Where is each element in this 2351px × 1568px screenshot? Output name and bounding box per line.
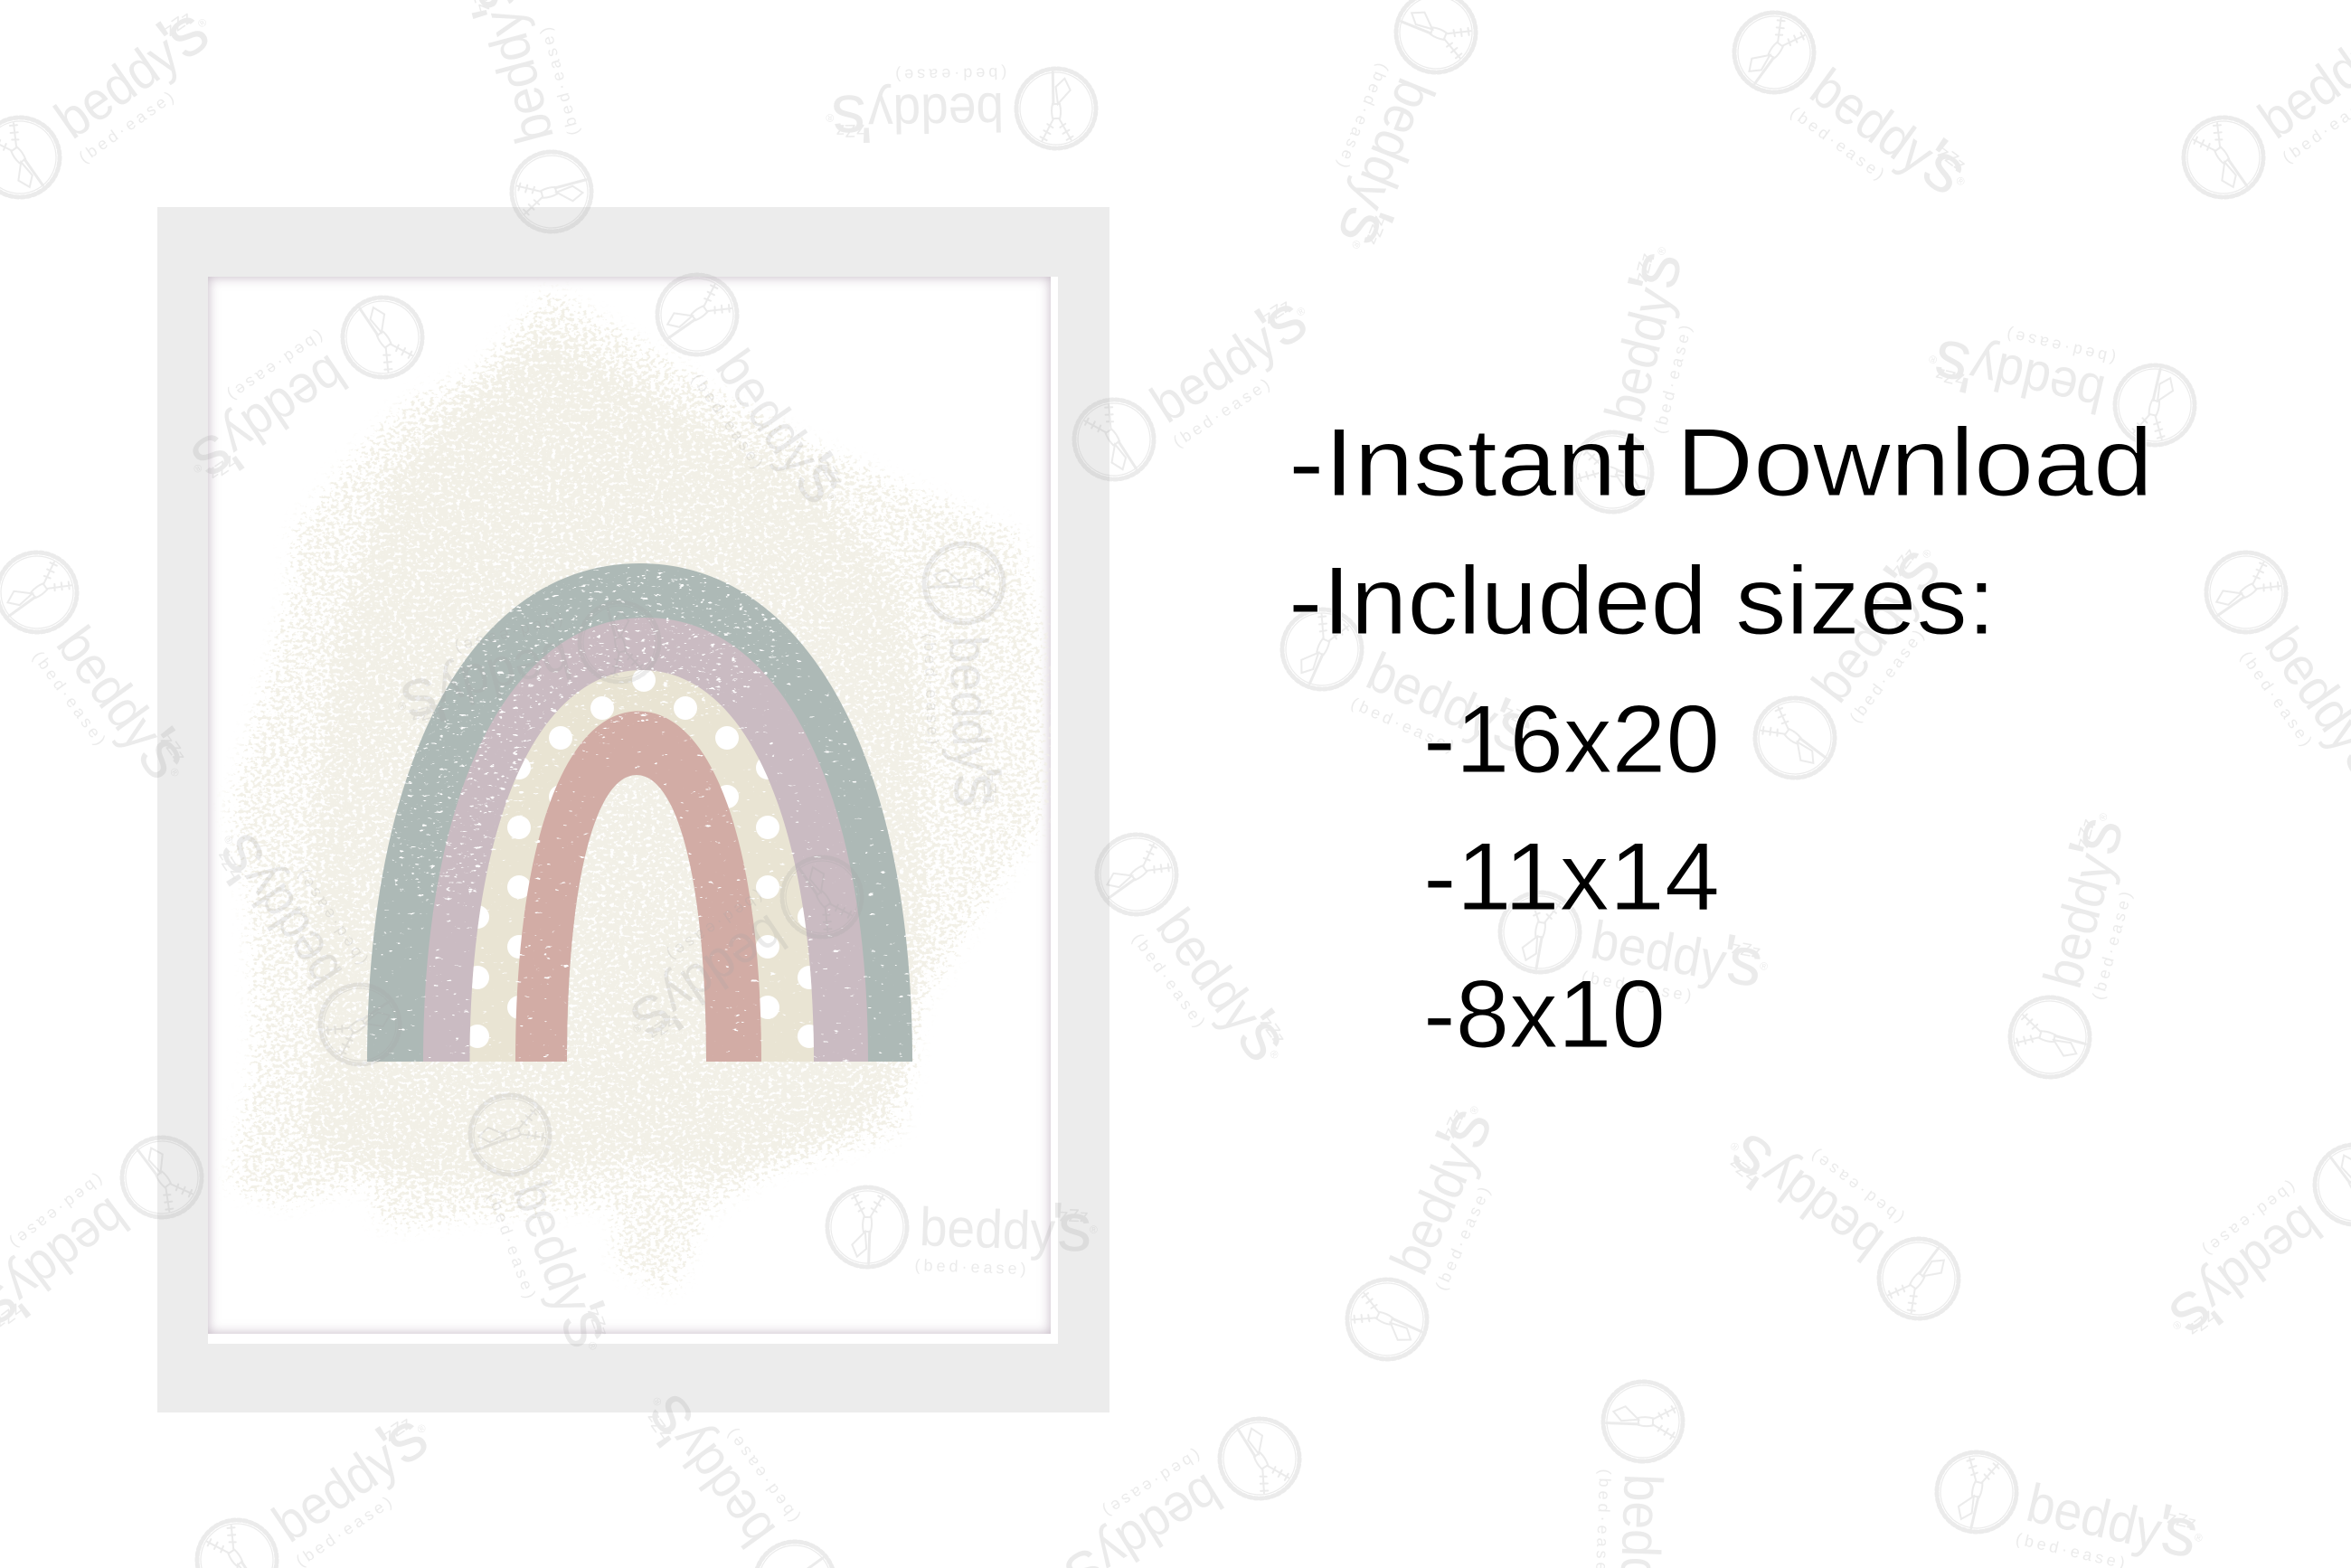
watermark logo: 's xyxy=(1243,280,1318,366)
watermark logo: beddy xyxy=(1587,910,1731,993)
watermark logo: zZz xyxy=(156,731,190,766)
watermark logo: ® xyxy=(1467,1104,1482,1117)
watermark logo: beddy xyxy=(1379,1134,1489,1283)
watermark logo: beddy xyxy=(919,1196,1056,1261)
line: size 8x10: -8x10 xyxy=(1423,959,1666,1068)
watermark logo: (bed·ease) xyxy=(75,86,180,166)
watermark logo: ® xyxy=(1349,239,1364,250)
watermark logo xyxy=(917,542,1017,816)
watermark logo: 's xyxy=(619,973,695,1059)
white polka dots on beige band xyxy=(466,668,821,1048)
watermark logo xyxy=(1707,1104,1978,1338)
watermark logo xyxy=(385,588,669,745)
watermark logo xyxy=(1735,526,1969,797)
watermark logo: zZz xyxy=(1934,143,1969,175)
watermark logo: beddy xyxy=(1145,898,1273,1043)
watermark logo xyxy=(623,1368,854,1568)
watermark logo: ® xyxy=(2096,811,2110,823)
watermark logo: 's xyxy=(396,659,454,743)
watermark logo: (bed·ease) xyxy=(721,1422,803,1526)
watermark logo: (bed·ease) xyxy=(1128,930,1211,1034)
watermark logo: (bed·ease) xyxy=(892,64,1006,84)
watermark logo: zZz xyxy=(978,774,1000,804)
line: size 11x14: -11x14 xyxy=(1423,822,1720,930)
watermark logo xyxy=(1715,0,1987,224)
watermark logo: (bed·ease) xyxy=(688,370,769,475)
watermark logo: ® xyxy=(1525,729,1537,744)
watermark logo: (bed·ease) xyxy=(291,864,370,968)
watermark logo: 's xyxy=(1904,124,1981,209)
watermark logo: (bed·ease) xyxy=(1580,968,1696,1006)
watermark logo: beddy xyxy=(1140,310,1287,434)
watermark logo: zZz xyxy=(2183,1307,2218,1340)
watermark logo xyxy=(166,278,440,504)
watermark logo: beddy xyxy=(658,1413,787,1558)
watermark logo: zZz xyxy=(2072,817,2100,850)
watermark logo: (bed·ease) xyxy=(921,633,942,749)
watermark logo: (bed·ease) xyxy=(4,1171,107,1254)
watermark logo: zZz xyxy=(1933,364,1966,390)
watermark logo: zZz xyxy=(642,1408,675,1443)
watermark logo: (bed·ease) xyxy=(1787,103,1891,185)
watermark logo xyxy=(2165,0,2351,217)
picture frame xyxy=(157,207,1109,1412)
watermark logo xyxy=(1928,1439,2212,1568)
watermark logo xyxy=(1920,309,2204,458)
watermark logo xyxy=(179,1393,453,1568)
watermark logo: 's xyxy=(777,439,862,515)
watermark logo: 's xyxy=(1869,533,1954,610)
distressed white specks, denser on the top-left of the arch xyxy=(384,570,814,904)
distressed white specks, sparse across the arch xyxy=(367,563,912,1062)
watermark logo: (bed·ease) xyxy=(2089,886,2136,1002)
watermark logo: 's xyxy=(1050,1188,1091,1267)
watermark logo xyxy=(1559,237,1712,522)
rainbow band: teal xyxy=(367,563,912,1062)
watermark logo: beddy xyxy=(1800,568,1931,713)
watermark logo xyxy=(1267,591,1551,784)
watermark logo: (bed·ease) xyxy=(2237,647,2318,752)
watermark logo: (bed·ease) xyxy=(661,887,766,966)
watermark logo: beddy xyxy=(228,853,354,999)
watermark logo xyxy=(1308,0,1493,263)
line: size 16x20: -16x20 xyxy=(1423,685,1720,793)
watermark logo: (bed·ease) xyxy=(1650,320,1695,436)
watermark logo: (bed·ease) xyxy=(1348,694,1460,757)
line: instant download: -Instant Download xyxy=(1289,408,2153,516)
watermark logo: ® xyxy=(585,1340,600,1352)
watermark logo: beddy xyxy=(1358,641,1507,751)
watermark logo: zZz xyxy=(1059,1205,1089,1227)
watermark logo: (bed·ease) xyxy=(2196,1178,2299,1261)
rainbow xyxy=(367,563,912,1062)
watermark logo: beddy xyxy=(1593,281,1685,428)
watermark logo xyxy=(454,1082,631,1367)
watermark logo: ® xyxy=(167,765,182,779)
watermark logo: 's xyxy=(1219,997,1304,1073)
watermark logo: beddy xyxy=(1964,335,2110,425)
watermark logo: (bed·ease) xyxy=(222,327,326,406)
watermark logo: beddy xyxy=(704,339,832,485)
watermark logo: 's xyxy=(1477,683,1544,769)
frame opening xyxy=(208,277,1058,1344)
line: included sizes: -Included sizes: xyxy=(1289,546,1996,655)
watermark logo: (bed·ease) xyxy=(449,611,565,658)
watermark logo: (bed·ease) xyxy=(484,1190,541,1304)
watermark logo: ® xyxy=(1920,547,1934,561)
watermark logo: beddy xyxy=(262,1428,409,1554)
watermark logo: zZz xyxy=(213,846,246,882)
watermark logo: beddy xyxy=(211,344,357,469)
watermark logo: beddy xyxy=(502,1173,605,1321)
watermark logo: beddy xyxy=(2022,1472,2167,1562)
watermark logo: ® xyxy=(824,490,839,504)
watermark logo xyxy=(1040,1399,1317,1568)
watermark logo: ® xyxy=(1090,1223,1098,1236)
watermark logo: 's xyxy=(1613,245,1697,301)
watermark logo: zZz xyxy=(1888,544,1921,580)
watermark logo: 's xyxy=(198,822,284,898)
watermark logo xyxy=(606,837,880,1063)
watermark logo: ® xyxy=(1294,304,1308,319)
watermark logo: ® xyxy=(2170,1318,2184,1333)
watermark logo: beddy xyxy=(1339,71,1447,219)
watermark logo: 's xyxy=(1421,1097,1506,1165)
watermark logo xyxy=(1590,1380,1690,1568)
watermark logo xyxy=(448,0,606,241)
watermark logo: ® xyxy=(195,15,209,31)
rainbow band: beige xyxy=(470,670,814,1062)
watermark logo: zZz xyxy=(644,1011,679,1044)
watermark logo xyxy=(2143,1125,2351,1359)
watermark logo: beddy xyxy=(867,81,1005,145)
watermark logo: ® xyxy=(630,1021,644,1035)
watermark logo: ® xyxy=(1267,1047,1281,1062)
watermark logo: (bed·ease) xyxy=(1333,61,1393,175)
watermark logo: zZz xyxy=(1260,296,1295,328)
watermark logo xyxy=(1493,881,1775,1017)
paint splash background xyxy=(231,292,1042,1289)
watermark logo: (bed·ease) xyxy=(2001,325,2118,368)
watermark logo xyxy=(1056,276,1332,499)
watermark logo: zZz xyxy=(2166,1507,2198,1534)
watermark logo: 's xyxy=(1928,324,1983,408)
rainbow band: pink xyxy=(515,711,761,1062)
watermark logo: zZz xyxy=(204,451,240,484)
watermark logo: 's xyxy=(1714,1119,1791,1204)
watermark logo: ® xyxy=(396,699,408,713)
watermark logo: zZz xyxy=(408,700,441,726)
watermark logo: zZz xyxy=(814,456,846,491)
watermark logo: zZz xyxy=(1631,251,1657,284)
watermark logo: 's xyxy=(1715,920,1767,1002)
watermark logo: 's xyxy=(2054,810,2139,868)
watermark logo xyxy=(0,534,209,806)
watermark logo: zZz xyxy=(836,120,865,140)
watermark logo xyxy=(2186,534,2351,808)
watermark logo: beddy xyxy=(430,628,577,723)
watermark logo: ® xyxy=(1928,353,1939,366)
watermark logo xyxy=(0,0,235,217)
watermark logo: (bed·ease) xyxy=(1097,1446,1204,1522)
watermark logo: ® xyxy=(222,833,236,846)
watermark logo: beddy xyxy=(45,616,174,760)
watermark logo xyxy=(1329,1091,1522,1374)
watermark logo xyxy=(194,808,420,1082)
watermark logo: 's xyxy=(939,765,1017,808)
watermark logo: zZz xyxy=(583,1306,612,1339)
watermark logo: ® xyxy=(650,1394,665,1409)
watermark logo xyxy=(637,256,866,530)
watermark logo: zZz xyxy=(1500,702,1535,732)
watermark logo: 's xyxy=(119,714,204,791)
watermark logo xyxy=(1996,803,2153,1087)
watermark logo: 's xyxy=(2157,1270,2235,1355)
watermark logo: ® xyxy=(191,461,204,476)
watermark logo: beddy xyxy=(2187,1194,2332,1324)
watermark logo: 's xyxy=(1323,191,1409,256)
watermark logo: ® xyxy=(415,1422,429,1436)
product details text xyxy=(1289,408,2153,1068)
watermark logo: (bed·ease) xyxy=(1846,623,1930,726)
watermark logo: ® xyxy=(2193,1531,2204,1544)
rainbow band: mauve xyxy=(423,618,868,1062)
watermark logo: beddy xyxy=(938,635,1003,772)
watermark logo xyxy=(1077,816,1308,1088)
watermark logo: beddy xyxy=(1749,1143,1893,1273)
watermark logo: ® xyxy=(1759,959,1769,973)
watermark logo xyxy=(0,1118,221,1352)
watermark logo: beddy xyxy=(2032,847,2126,994)
watermark logo: (bed·ease) xyxy=(29,647,111,751)
watermark logo: zZz xyxy=(1361,213,1390,248)
watermark logo xyxy=(825,62,1097,157)
watermark logo: (bed·ease) xyxy=(1804,1144,1907,1228)
watermark logo: zZz xyxy=(380,1413,415,1446)
watermark logo: beddy xyxy=(650,903,797,1029)
watermark logo: ® xyxy=(971,805,984,814)
watermark logo: ® xyxy=(1953,174,1968,189)
watermark logo: zZz xyxy=(1725,1152,1761,1185)
watermark logo: 's xyxy=(364,1398,439,1484)
watermark logo: 's xyxy=(628,1383,713,1459)
watermark logo: (bed·ease) xyxy=(914,1256,1030,1278)
watermark logo: zZz xyxy=(161,8,196,41)
watermark logo: 's xyxy=(180,413,256,499)
watermark logo: 's xyxy=(833,80,873,157)
watermark logo: ® xyxy=(1655,245,1669,257)
watermark logo: zZz xyxy=(1730,938,1762,963)
watermark logo: (bed·ease) xyxy=(1431,1181,1495,1293)
watermark logo: 's xyxy=(543,1292,628,1355)
watermark logo: (bed·ease) xyxy=(293,1491,398,1568)
watermark logo: (bed·ease) xyxy=(535,22,582,137)
watermark logo: ® xyxy=(1728,1139,1742,1154)
watermark logo: beddy xyxy=(44,23,190,150)
paper sheet with inner shadow xyxy=(208,277,1051,1334)
watermark logo: beddy xyxy=(1800,57,1945,185)
watermark logo: (bed·ease) xyxy=(1170,373,1276,451)
watermark logo: ® xyxy=(826,111,834,124)
watermark logo: zZz xyxy=(1440,1106,1469,1141)
watermark logo xyxy=(826,1180,1100,1280)
watermark logo: zZz xyxy=(1256,1013,1289,1048)
